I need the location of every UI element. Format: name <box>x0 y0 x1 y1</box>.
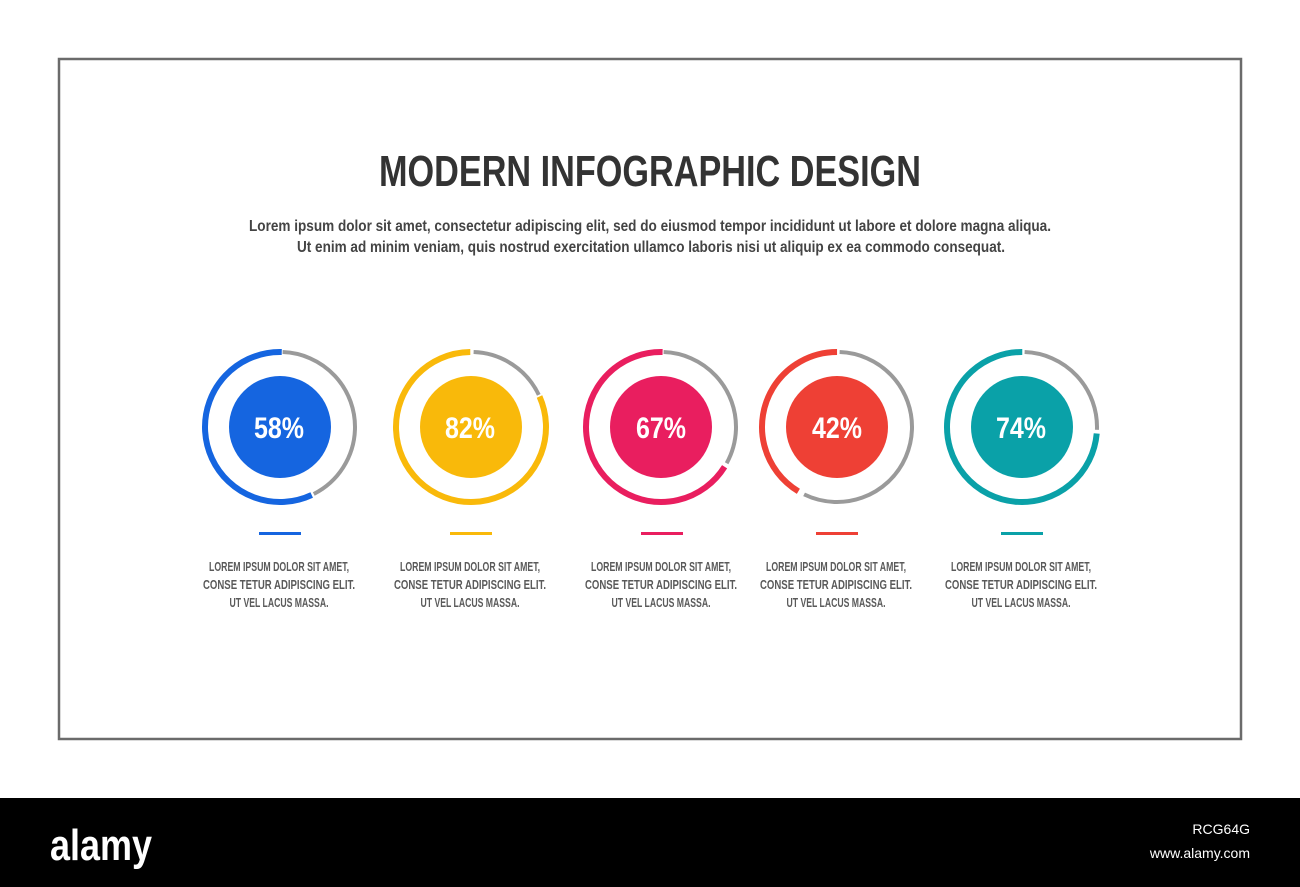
item 2: 82% <box>372 328 570 610</box>
item 2: 82%: CONSE TETUR ADIPISCING ELIT. <box>394 578 546 592</box>
item 1: 58%: LOREM IPSUM DOLOR SIT AMET, <box>209 560 349 574</box>
item 5: 74% <box>941 346 1103 610</box>
item 5: 74%: UT VEL LACUS MASSA. <box>972 596 1070 610</box>
item 3: 67%: CONSE TETUR ADIPISCING ELIT. <box>585 578 737 592</box>
footer band: RCG64G <box>1192 821 1250 837</box>
item 4: 42%: UT VEL LACUS MASSA. <box>786 596 886 610</box>
footer band: alamy <box>50 821 152 870</box>
item 5: 74%: LOREM IPSUM DOLOR SIT AMET, <box>951 560 1091 574</box>
item 1: 58% <box>180 327 380 610</box>
footer band <box>0 798 1300 887</box>
frame <box>59 59 1241 739</box>
item 1: 58%: 58% <box>254 412 304 445</box>
item 2: 82%: 82% <box>445 412 495 445</box>
item 5: 74%: CONSE TETUR ADIPISCING ELIT. <box>945 578 1097 592</box>
subtitle: Lorem ipsum dolor sit amet, consectetur adipiscing elit, sed do eiusmod tempor incididunt ut labore et dolore magna aliqua. <box>249 218 1051 235</box>
item 4: 42%: 42% <box>812 412 862 445</box>
item 1: 58%: UT VEL LACUS MASSA. <box>230 596 328 610</box>
subtitle: Ut enim ad minim veniam, quis nostrud exercitation ullamco laboris nisi ut aliquip ex ea commodo consequat. <box>297 239 1005 256</box>
item 2: 82%: UT VEL LACUS MASSA. <box>420 596 520 610</box>
item 4: 42%: CONSE TETUR ADIPISCING ELIT. <box>760 578 912 592</box>
title: MODERN INFOGRAPHIC DESIGN <box>379 147 921 196</box>
item 4: 42%: LOREM IPSUM DOLOR SIT AMET, <box>766 560 906 574</box>
item 5: 74%: 74% <box>996 412 1046 445</box>
item 3: 67% <box>558 324 764 610</box>
item 3: 67%: LOREM IPSUM DOLOR SIT AMET, <box>591 560 731 574</box>
item 3: 67%: 67% <box>636 412 686 445</box>
item 2: 82%: LOREM IPSUM DOLOR SIT AMET, <box>400 560 540 574</box>
subtitle <box>249 218 1051 256</box>
item 1: 58%: CONSE TETUR ADIPISCING ELIT. <box>203 578 355 592</box>
footer band: www.alamy.com <box>1149 845 1250 861</box>
item 3: 67%: UT VEL LACUS MASSA. <box>612 596 710 610</box>
item 4: 42% <box>734 324 940 610</box>
